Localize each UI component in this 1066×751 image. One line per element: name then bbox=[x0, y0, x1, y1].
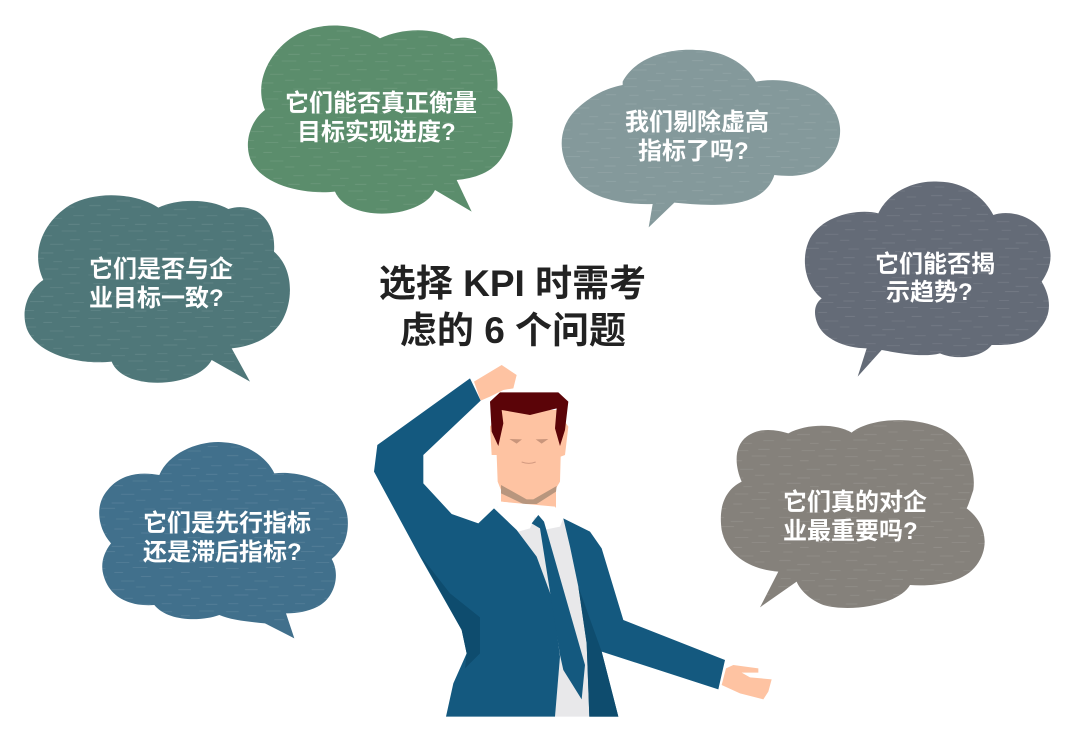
bubble text: 我们剔除虚高 bbox=[625, 109, 769, 136]
title: 虑的 6 个问题 bbox=[400, 310, 626, 351]
bubble shape bbox=[99, 442, 348, 638]
tie bbox=[532, 515, 585, 699]
shirt bbox=[497, 507, 589, 717]
bubble text: 业目标一致? bbox=[89, 285, 224, 312]
speech bubble: measure progress bbox=[248, 26, 513, 214]
closed eyes bbox=[509, 439, 548, 444]
bubble shape bbox=[562, 50, 840, 227]
collar bbox=[497, 502, 563, 532]
jacket left side and raised arm bbox=[374, 378, 560, 717]
bubble text: 它们是否与企 bbox=[89, 256, 233, 283]
bubble text: 它们能否真正衡量 bbox=[285, 90, 477, 117]
bubble text: 示趋势? bbox=[886, 279, 973, 306]
mouth bbox=[522, 462, 536, 463]
bubble shape bbox=[805, 182, 1051, 377]
bubble text: 它们是先行指标 bbox=[143, 510, 311, 537]
speech bubble: leading or lagging bbox=[99, 442, 348, 638]
speech bubble: most important bbox=[721, 420, 985, 608]
chin shadow bbox=[501, 485, 557, 504]
bubble shape bbox=[248, 26, 513, 214]
bubble shape bbox=[25, 195, 290, 383]
jacket inner shadow bbox=[578, 587, 618, 717]
illustration: businessman scratching his head bbox=[374, 365, 772, 717]
bubble text: 还是滞后指标? bbox=[143, 539, 302, 566]
bubble text: 它们能否揭 bbox=[875, 251, 995, 278]
bubble text: 业最重要吗? bbox=[783, 518, 918, 545]
speech bubble: reveal trends bbox=[805, 182, 1051, 377]
speech bubble: aligned with goals bbox=[25, 195, 290, 383]
sleeve fold shadow bbox=[420, 555, 480, 668]
title: 选择 KPI 时需考 bbox=[379, 263, 646, 304]
open hand bbox=[722, 665, 772, 699]
jacket right side and arm bbox=[563, 518, 725, 717]
bubble shape bbox=[721, 420, 985, 608]
bubble text: 指标了吗? bbox=[638, 138, 749, 165]
bubble text: 它们真的对企 bbox=[783, 489, 927, 516]
bubble text: 目标实现进度? bbox=[297, 119, 456, 146]
speech bubble: vanity metrics bbox=[562, 50, 840, 227]
hand on head bbox=[474, 365, 517, 401]
neck and face bbox=[490, 410, 568, 508]
hair bbox=[490, 392, 568, 446]
